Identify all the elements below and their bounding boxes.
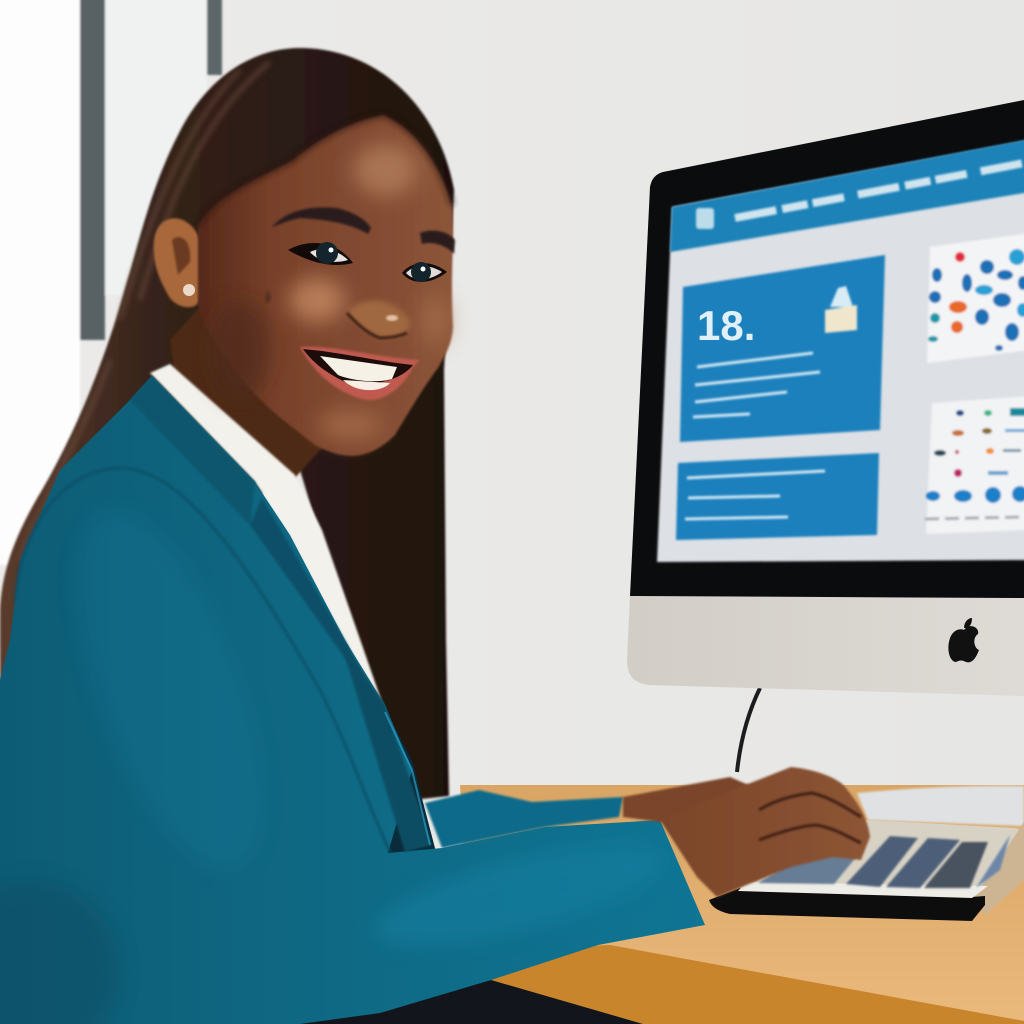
teal jacket — [0, 376, 705, 1024]
face shape — [198, 115, 453, 456]
desk front edge — [480, 945, 1024, 1024]
lower teeth — [343, 380, 390, 390]
lapel edge highlight — [385, 712, 430, 845]
silver strip — [738, 882, 988, 898]
header icon — [696, 208, 714, 229]
shoulder seam — [15, 468, 390, 852]
hair back — [0, 48, 454, 800]
laptop tan edge — [975, 822, 1024, 915]
inner ear shadow — [172, 237, 190, 275]
white shirt collar — [150, 364, 384, 708]
hand on keyboard — [623, 767, 870, 897]
card text lines — [693, 353, 820, 417]
laptop and keyboard — [709, 786, 1024, 921]
monitor — [627, 100, 1024, 772]
mouth — [300, 347, 420, 400]
lapel fold — [340, 640, 432, 852]
main blue card — [680, 255, 885, 442]
ear — [154, 218, 200, 307]
header blurred title — [735, 163, 1024, 218]
laptop lid — [857, 786, 1024, 826]
far sleeve — [425, 790, 623, 848]
dot chart top right — [927, 233, 1024, 363]
far hand — [623, 777, 760, 822]
hair sheen — [20, 62, 270, 560]
laptop black front — [709, 888, 985, 921]
window and frame — [0, 0, 222, 565]
screen header bar — [670, 139, 1024, 252]
right eye — [402, 262, 447, 282]
hairline shadow — [198, 115, 452, 225]
dot chart bottom right — [925, 396, 1024, 534]
right eyebrow — [420, 231, 455, 254]
neck — [170, 307, 340, 480]
card number: 18. — [697, 302, 755, 349]
near hand — [660, 767, 870, 897]
monitor bezel — [630, 100, 1024, 598]
upper teeth — [320, 356, 397, 381]
apple-style logo — [948, 618, 979, 662]
jacket body and near sleeve — [0, 376, 705, 1024]
finger creases — [759, 793, 861, 843]
desk top surface — [460, 785, 1024, 1024]
desk — [290, 785, 1024, 1024]
earring — [183, 284, 195, 296]
face — [154, 115, 455, 456]
monitor stand cable — [737, 688, 760, 772]
lower blue card — [676, 453, 879, 540]
monitor chin — [627, 596, 1024, 696]
card icon — [825, 286, 857, 333]
lit arm highlight — [366, 825, 674, 965]
laptop deck — [746, 820, 1024, 892]
left eye — [288, 242, 353, 265]
dark gap between arm and jacket — [380, 700, 436, 856]
upper arm highlight — [39, 488, 301, 892]
facial highlights — [210, 144, 449, 441]
left eyebrow — [272, 207, 371, 234]
screen — [657, 140, 1024, 562]
lower lapel — [250, 498, 395, 735]
dark area under desk — [290, 980, 643, 1024]
upper lapel — [130, 376, 255, 525]
nose — [347, 300, 410, 338]
keyboard keys — [758, 835, 1010, 888]
lower body shadow — [0, 880, 120, 1024]
mole — [265, 291, 271, 303]
